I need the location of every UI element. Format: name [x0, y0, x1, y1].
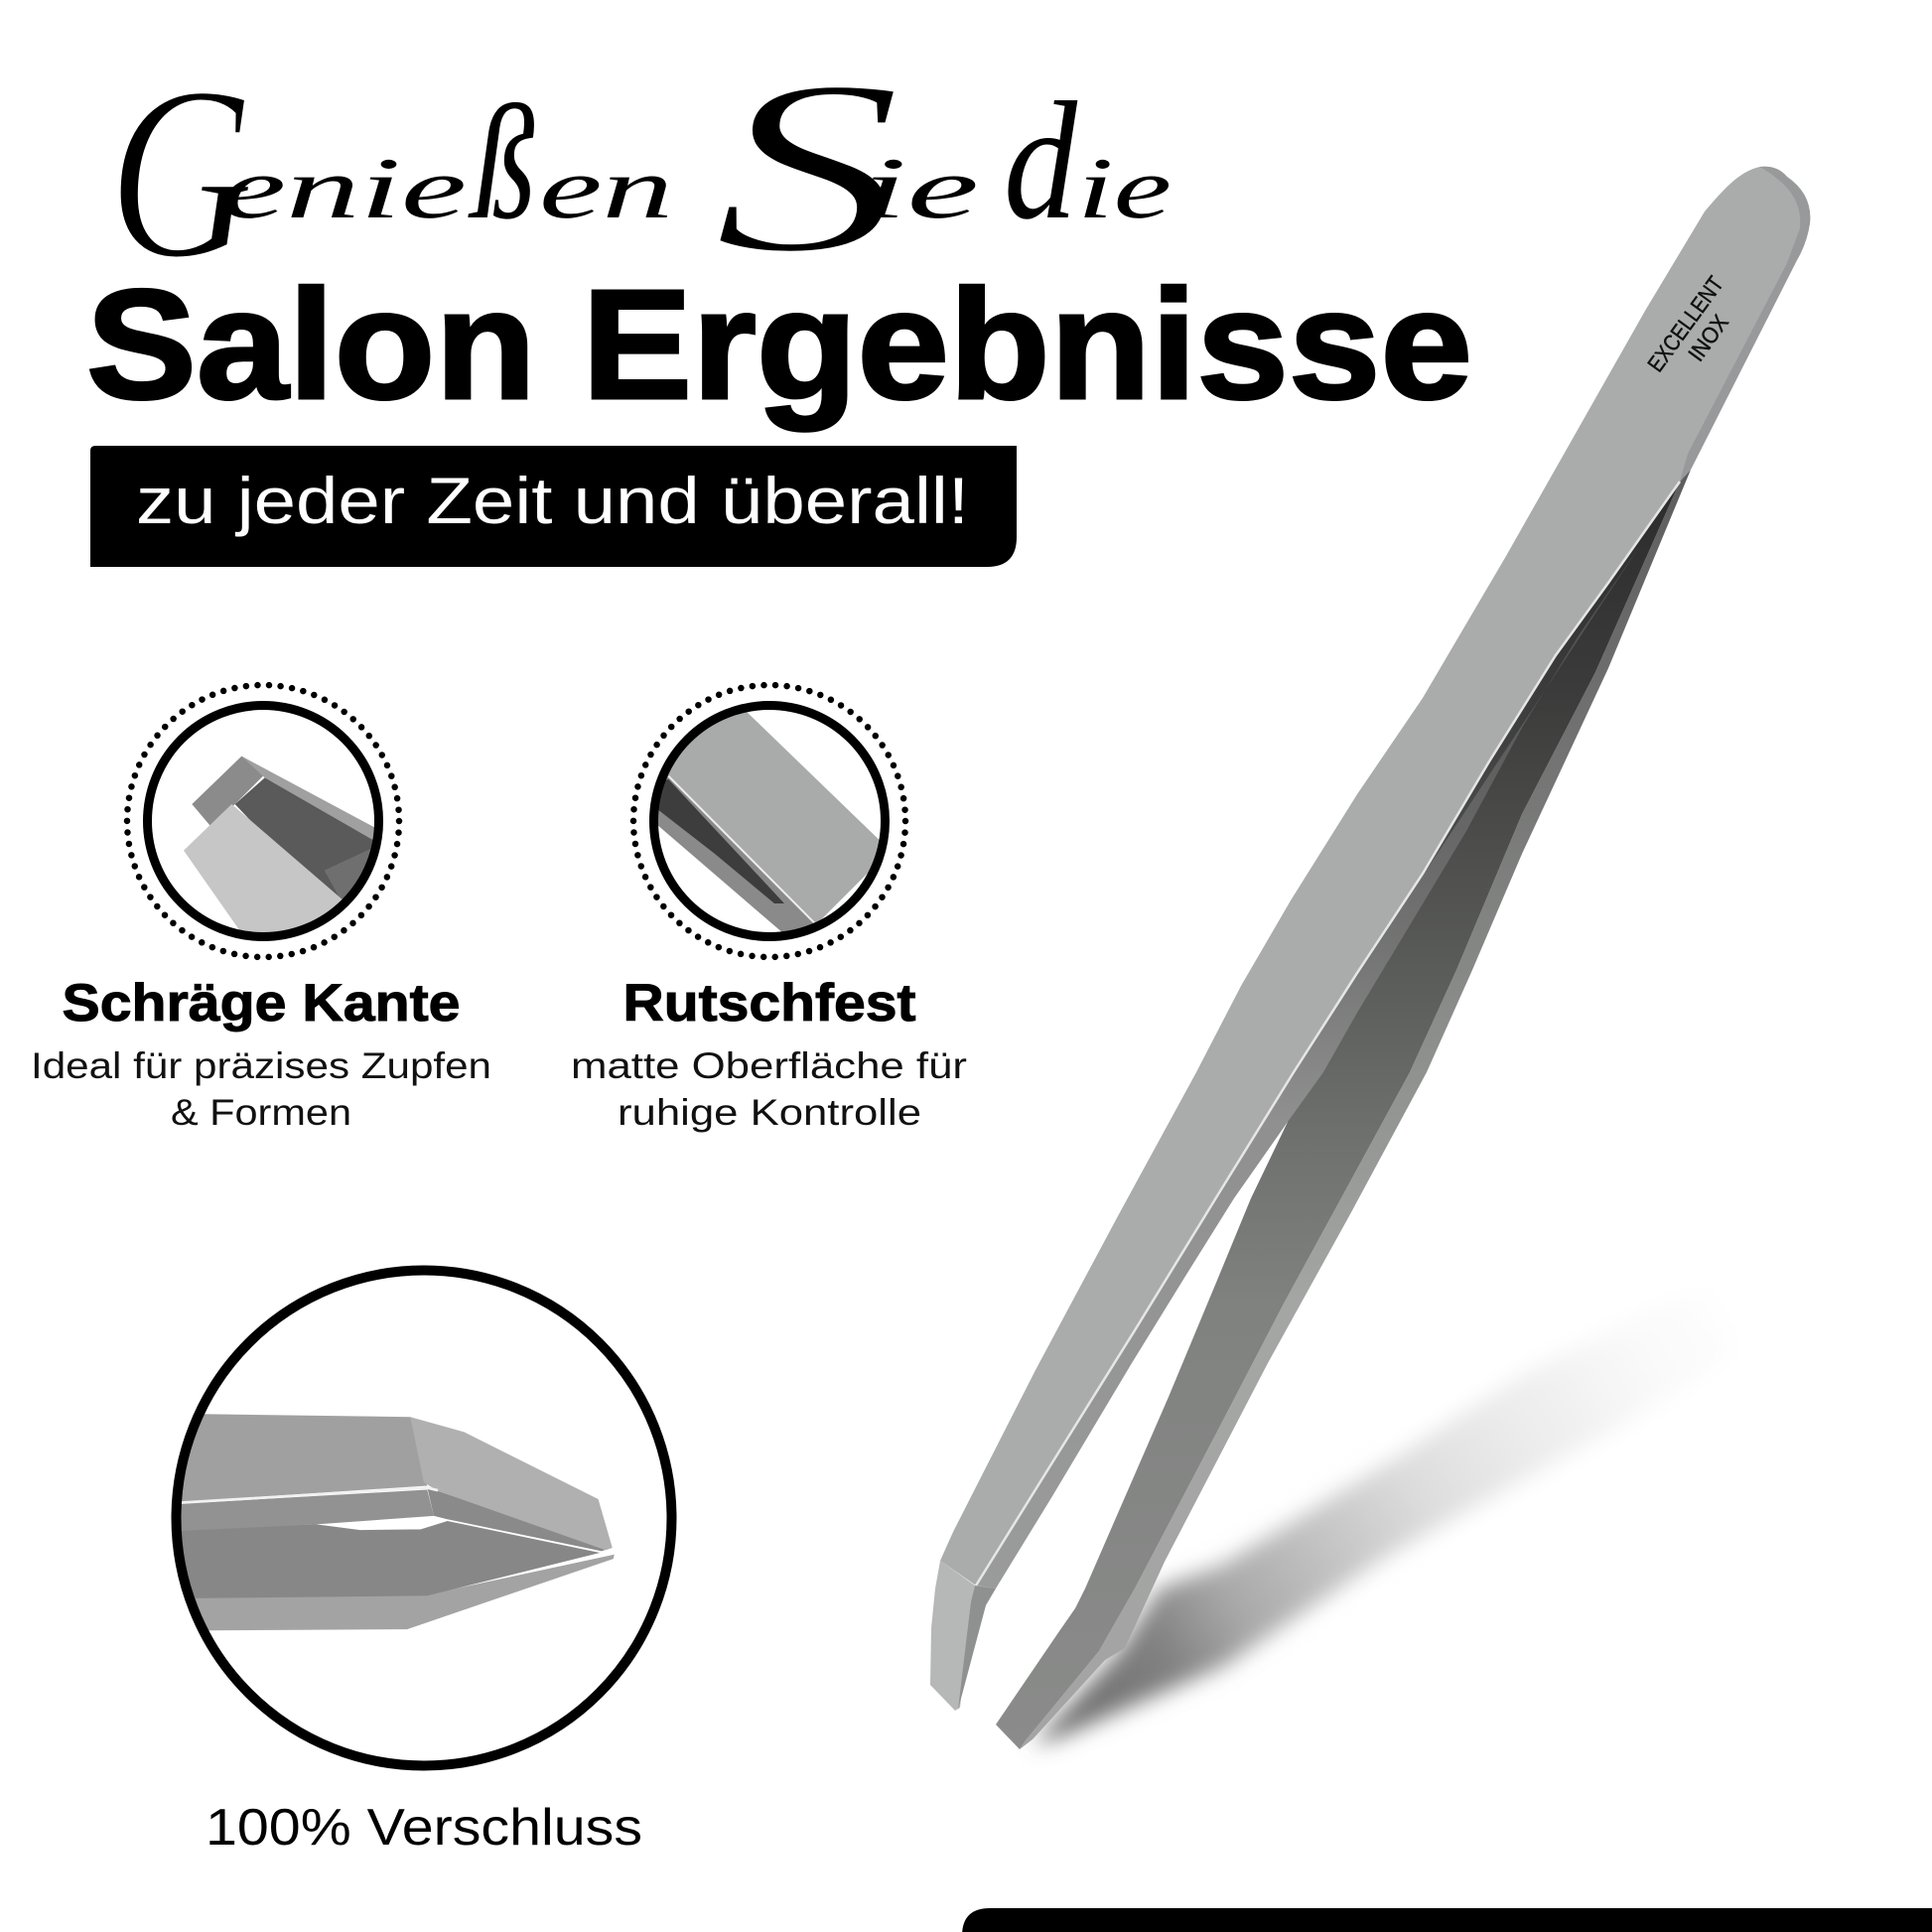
- script heading: G: [108, 36, 254, 311]
- label text: [571, 1045, 967, 1133]
- icon: ring: [147, 705, 379, 937]
- tweezers: [930, 167, 1810, 1749]
- icon: tip close-up: [184, 757, 374, 932]
- icon: grip close-up: [658, 712, 880, 931]
- upper plate: [940, 167, 1810, 1586]
- engraving: EXCELLENT: EXCELLENT: [1642, 271, 1728, 376]
- script heading: d: [1004, 68, 1078, 254]
- banner: [90, 446, 1017, 567]
- script heading: [108, 30, 1172, 311]
- script heading: en: [539, 141, 673, 237]
- script heading: S: [713, 30, 902, 305]
- script heading: ie: [862, 141, 979, 237]
- icon: ring: [653, 705, 886, 937]
- label text: Ideal für präzises Zupfen: [31, 1045, 491, 1086]
- icon: tip closure: [173, 1414, 615, 1630]
- upper plate rim: [1680, 167, 1810, 482]
- label text: matte Oberfläche für: [571, 1045, 967, 1086]
- feature: closure close-up: [173, 1271, 671, 1765]
- lower arm inner face: [996, 482, 1680, 1749]
- feature: Schräge Kante: [31, 685, 491, 1133]
- upper plate side strip: [976, 541, 1643, 1588]
- script heading: ß: [468, 71, 536, 253]
- shadow under tweezers: [1033, 1276, 1742, 1745]
- heading: Salon Ergebnisse: Salon Ergebnisse: [86, 258, 1472, 432]
- upper tip side: [958, 1586, 996, 1710]
- engraving: INOX: INOX: [1683, 310, 1733, 366]
- script heading: enie: [220, 141, 467, 237]
- icon: ring: [177, 1271, 671, 1765]
- icon: dotted ring: [633, 685, 905, 957]
- label title: Schräge Kante: [62, 974, 461, 1033]
- icon: dotted ring: [127, 685, 399, 957]
- banner: zu jeder Zeit und überall!: [136, 464, 969, 537]
- bottom corner bar: [962, 1908, 1932, 1932]
- caption: 100% Verschluss: 100% Verschluss: [206, 1799, 642, 1857]
- script heading: ie: [1077, 141, 1172, 237]
- label text: & Formen: [171, 1092, 351, 1133]
- label text: ruhige Kontrolle: [618, 1092, 921, 1133]
- label title: Rutschfest: [623, 974, 915, 1033]
- lower arm outer rim: [1020, 470, 1691, 1749]
- upper tip facet: [930, 1561, 975, 1711]
- crease highlight: [976, 482, 1680, 1586]
- label text: [31, 1045, 491, 1133]
- feature: Rutschfest: [571, 685, 967, 1133]
